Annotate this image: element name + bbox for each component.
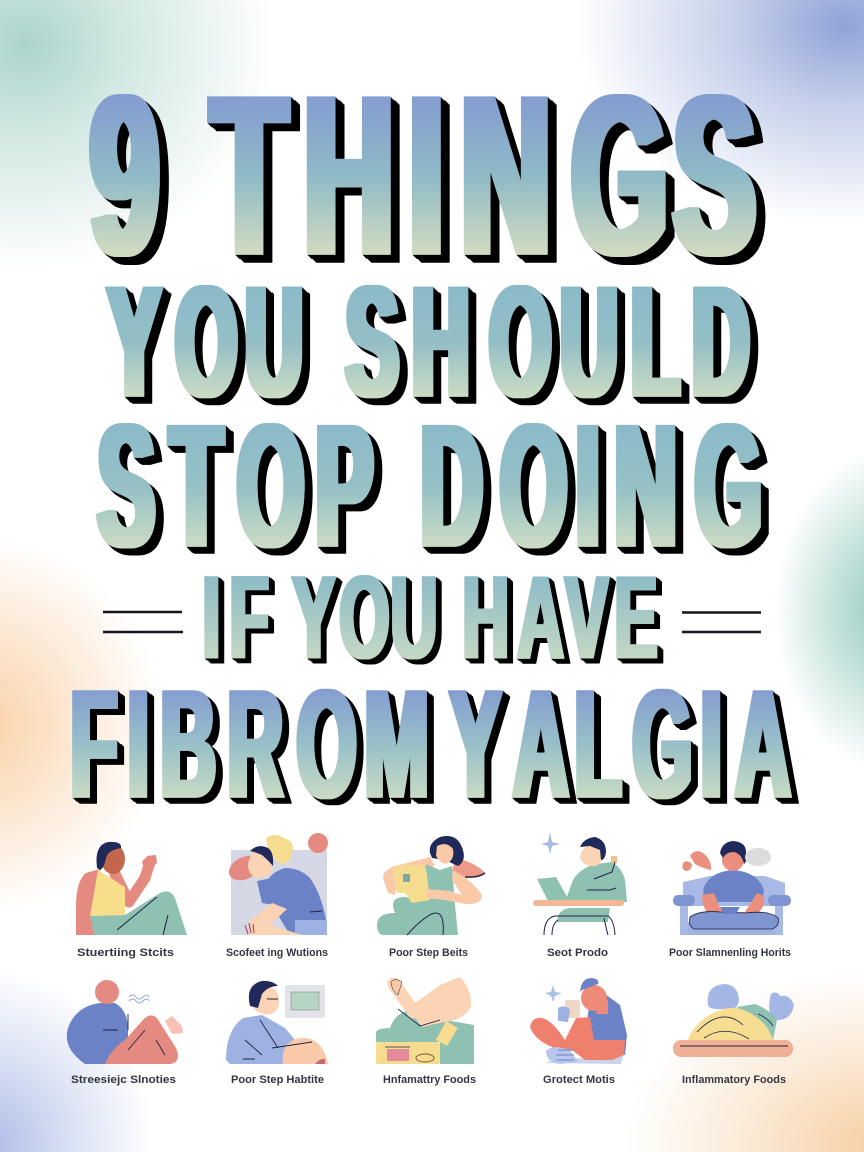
label: Streesiejc Slnoties: Streesiejc Slnoties [71, 1074, 176, 1086]
icon: man sitting, waves [67, 980, 183, 1064]
label: Hnfamattry Foods: Hnfamattry Foods [383, 1074, 476, 1086]
label: Scofeet ing Wutions: Scofeet ing Wutions [226, 947, 328, 959]
title line: 9 THINGS: 9 THINGS [90, 48, 756, 302]
right double rule [682, 612, 761, 632]
label: Grotect Motis: Grotect Motis [543, 1074, 615, 1086]
title line: FIBROMYALGIA: FIBROMYALGIA [70, 658, 791, 830]
label: Poor Step Beits: Poor Step Beits [389, 947, 468, 959]
icon: person slumped [225, 833, 328, 935]
icon: reclining figure and food tray [376, 977, 474, 1064]
label: Seot Prodo: Seot Prodo [547, 947, 608, 959]
icon: woman holding food box [377, 836, 485, 935]
icon: woman talking [76, 842, 187, 935]
title line: YOU SHOULD: YOU SHOULD [108, 254, 749, 430]
icon: inflammatory food plate [673, 984, 794, 1057]
title [70, 48, 791, 830]
left double rule [103, 612, 183, 632]
title line: IF YOU HAVE: IF YOU HAVE [202, 553, 658, 684]
label: Poor Step Habtite: Poor Step Habtite [231, 1074, 324, 1086]
icon: man at monitor [226, 981, 328, 1064]
icon: man cross-legged with drink [530, 978, 627, 1064]
icon: person at laptop desk [533, 832, 627, 935]
label: Poor Slamnenling Horits: Poor Slamnenling Horits [669, 947, 791, 959]
icon: person eating on sofa [673, 841, 791, 935]
label: Inflammatory Foods: Inflammatory Foods [682, 1074, 786, 1086]
label: Stuertiing Stcits: Stuertiing Stcits [77, 947, 174, 959]
title line: STOP DOING: STOP DOING [98, 389, 762, 584]
